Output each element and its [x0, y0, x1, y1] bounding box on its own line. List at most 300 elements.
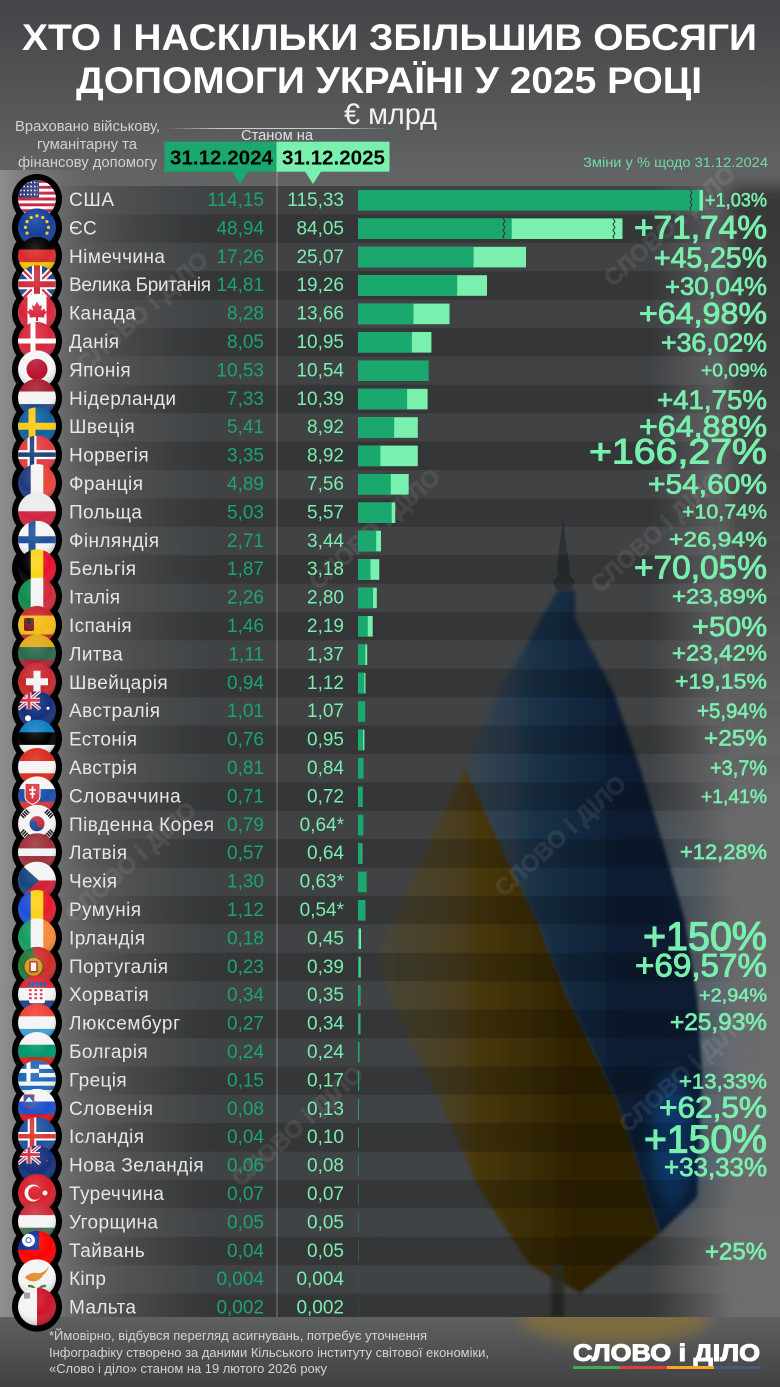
value 2024: 0,76 [227, 730, 264, 751]
row: Словенія [18, 1089, 767, 1127]
percent change: +26,94% [669, 529, 767, 552]
value 2024: 1,01 [227, 701, 264, 722]
percent change: +3,7% [710, 757, 767, 780]
percent change: +25,93% [670, 1009, 767, 1036]
flag: Мальта [18, 1288, 56, 1326]
percent change: +25% [704, 726, 767, 751]
percent change: +69,57% [635, 947, 767, 983]
country name: Канада [69, 304, 136, 325]
flag: Туреччина [18, 1174, 56, 1212]
value 2024: 0,15 [227, 1070, 264, 1091]
bar [358, 502, 395, 523]
country name: Литва [69, 644, 123, 665]
percent change: +150% [643, 915, 767, 959]
flag: Польща [18, 494, 56, 526]
row: Люксембург [18, 1004, 767, 1042]
bar with axis break [358, 190, 703, 211]
bar [358, 1070, 359, 1091]
bar [358, 474, 409, 495]
value 2024: 0,24 [227, 1042, 264, 1063]
row: Хорватія [18, 975, 767, 1014]
value 2024: 8,28 [227, 304, 264, 325]
row: Кіпр [18, 1259, 358, 1297]
percent change: +25% [705, 1238, 767, 1265]
footer notes: *Ймовірно, відбувся перегляд асигнувань, потребує уточнення [49, 1328, 427, 1343]
value 2024: 0,94 [227, 673, 264, 694]
row: Південна Корея [18, 805, 363, 843]
value 2025: 1,07 [307, 701, 344, 722]
value 2024: 10,53 [216, 360, 264, 381]
flag: Чехія [18, 862, 56, 900]
bar [358, 446, 418, 466]
value 2024: 0,34 [227, 985, 264, 1006]
row: Румунія [18, 890, 366, 928]
value 2024: 1,46 [227, 616, 264, 637]
flag: Південна Корея [18, 805, 56, 843]
value 2024: 1,30 [227, 872, 264, 893]
row: Ісландія [18, 1117, 767, 1162]
bar [358, 872, 367, 892]
note: change column: Зміни у % щодо 31.12.2024 [583, 154, 768, 170]
country name: Фінляндія [69, 531, 159, 552]
date header [164, 127, 390, 184]
row: Швейцарія [18, 663, 766, 696]
row: Австралія [18, 691, 766, 724]
bar [358, 616, 373, 637]
percent change: +23,89% [672, 585, 767, 608]
country name: Італія [69, 588, 120, 609]
bar [357, 1156, 360, 1176]
bar [358, 247, 526, 267]
value 2025: 1,12 [307, 673, 344, 694]
value 2024: 0,81 [227, 758, 264, 779]
percent change: +1,03% [705, 190, 767, 212]
value 2025: 0,72 [307, 786, 344, 807]
percent change: +19,15% [675, 670, 767, 693]
value 2025: 3,44 [307, 531, 344, 552]
country name: Румунія [69, 900, 141, 921]
row: Канада [18, 294, 767, 332]
flag: Швеція [18, 407, 56, 440]
percent change: +33,33% [664, 1152, 767, 1182]
value 2024: 0,04 [227, 1241, 264, 1262]
watermarks: СЛОВО і ДІЛО [490, 771, 632, 902]
watermarks: СЛОВО і ДІЛО [304, 464, 446, 595]
value 2024: 7,33 [227, 389, 264, 410]
row: Нідерланди [18, 379, 766, 413]
row stripes [60, 214, 740, 1317]
country name: Швейцарія [69, 673, 168, 694]
country name: Мальта [69, 1298, 136, 1319]
country name: Латвія [69, 843, 127, 864]
row: Японія [18, 350, 767, 384]
watermarks: СЛОВО і ДІЛО [72, 247, 214, 378]
chart: aid by country [18, 180, 767, 1326]
footer band [0, 1317, 780, 1387]
flag: Португалія [18, 947, 56, 985]
row: Туреччина [18, 1174, 359, 1212]
watermarks: СЛОВО і ДІЛО [60, 797, 202, 928]
value 2024: 2,71 [227, 531, 264, 552]
country name: Данія [69, 332, 119, 353]
row: Фінляндія [18, 520, 766, 554]
row: Польща [18, 494, 767, 526]
watermarks: СЛОВО і ДІЛО [586, 467, 728, 598]
percent change: +12,28% [680, 841, 767, 864]
value 2025: 2,19 [307, 616, 344, 637]
row: Швеція [18, 407, 766, 440]
country name: Кіпр [69, 1269, 106, 1290]
percent change: +54,60% [648, 468, 767, 500]
value 2025: 0,54* [300, 900, 345, 921]
percent change: +64,88% [639, 411, 767, 444]
percent change: +70,05% [634, 550, 767, 586]
row: Мальта [18, 1288, 358, 1326]
percent change: +71,74% [634, 209, 767, 245]
country name: Польща [69, 502, 142, 523]
country name: Нова Зеландія [69, 1156, 204, 1177]
country name: Хорватія [69, 985, 149, 1006]
bar [358, 559, 379, 580]
bar [358, 957, 361, 977]
value 2024: 14,81 [216, 275, 264, 296]
country name: Ісландія [69, 1127, 144, 1148]
country name: Туреччина [69, 1184, 164, 1205]
note: aid types: фінансову допомогу [18, 154, 157, 171]
title: ХТО І НАСКІЛЬКИ ЗБІЛЬШИВ ОБСЯГИ [22, 16, 757, 58]
flag: Словаччина [18, 776, 56, 815]
bar [358, 843, 362, 864]
bar [358, 417, 418, 438]
value 2024: 1,87 [227, 559, 264, 580]
value 2025: 1,37 [307, 644, 344, 665]
flag: Іспанія [18, 606, 56, 640]
flag: Японія [18, 350, 56, 384]
value 2025: 84,05 [296, 218, 344, 239]
percent change: +0,09% [701, 360, 767, 381]
value 2024: 1,11 [228, 644, 264, 665]
flag rings [12, 174, 62, 1334]
country name: Ірландія [69, 928, 145, 949]
row: Нова Зеландія [18, 1146, 767, 1184]
country name: Японія [69, 360, 131, 381]
value 2025: 0,05 [307, 1212, 344, 1233]
watermarks: СЛОВО і ДІЛО [614, 1007, 756, 1138]
flag: Румунія [18, 890, 56, 928]
percent change: +23,42% [672, 641, 767, 666]
value 2024: 0,04 [227, 1127, 264, 1148]
value 2024: 0,71 [227, 786, 264, 807]
watermarks: СЛОВО і ДІЛО [599, 161, 741, 292]
value 2024: 1,12 [227, 900, 264, 921]
value 2025: 0,13 [307, 1099, 344, 1120]
value 2024: 48,94 [216, 218, 264, 239]
value 2024: 3,35 [227, 446, 264, 467]
bar [358, 332, 431, 353]
country name: Словаччина [69, 786, 181, 807]
value 2024: 0,23 [227, 957, 264, 978]
flag: Ірландія [18, 918, 56, 956]
flag: Нова Зеландія [18, 1146, 56, 1184]
country name: Франція [69, 474, 143, 495]
flag: Італія [18, 578, 56, 611]
country name: Південна Корея [69, 815, 214, 836]
value 2025: 0,24 [307, 1042, 344, 1063]
flag: Бельгія [18, 549, 56, 582]
value 2024: 5,03 [227, 502, 264, 523]
country name: Тайвань [69, 1241, 145, 1262]
country name: США [69, 190, 114, 211]
percent change: +150% [644, 1119, 767, 1162]
row: Греція [18, 1060, 767, 1098]
row: Бельгія [18, 549, 767, 587]
bar [358, 1099, 359, 1119]
value 2024: 2,26 [227, 588, 264, 609]
row: Словаччина [18, 776, 767, 815]
bar [358, 531, 381, 551]
background photo: Ukrainian flag [377, 519, 725, 1318]
row: Литва [18, 634, 766, 668]
row: Ірландія [18, 915, 767, 959]
value 2025: 0,34 [307, 1014, 344, 1035]
bar [358, 673, 366, 693]
note: aid types: Враховано військову, [15, 118, 160, 135]
percent change: +36,02% [661, 330, 767, 358]
country name: Португалія [69, 957, 168, 978]
value 2025: 115,33 [287, 190, 344, 211]
percent change: +166,27% [589, 432, 767, 471]
value 2025: 0,84 [307, 758, 344, 779]
flag: США [18, 180, 56, 214]
value 2025: 0,45 [307, 928, 344, 949]
country name: Нідерланди [69, 389, 176, 410]
value 2024: 0,004 [216, 1269, 264, 1290]
row: Естонія [18, 720, 767, 758]
row: Норвегія [18, 436, 766, 469]
value 2025: 0,08 [307, 1156, 344, 1177]
value 2025: 0,002 [296, 1298, 344, 1319]
value 2025: 8,92 [307, 417, 344, 438]
bar [357, 1184, 360, 1205]
bar [358, 758, 364, 779]
row: Тайвань [18, 1231, 767, 1269]
bar [358, 730, 364, 750]
country name: Австрія [69, 758, 137, 779]
country name: Швеція [69, 417, 135, 438]
value 2024: 0,05 [227, 1212, 264, 1233]
bar [357, 1269, 360, 1290]
bar [358, 588, 377, 608]
country name: Люксембург [69, 1014, 180, 1035]
country name: Велика Британія [69, 275, 211, 296]
percent change: +50% [692, 611, 767, 642]
value 2025: 7,56 [307, 474, 344, 495]
flag: Греція [18, 1060, 56, 1098]
row: США [18, 180, 767, 218]
bar [358, 360, 429, 381]
subtitle: unit: € млрд [344, 98, 437, 131]
bar [358, 928, 361, 949]
row: Данія [18, 322, 766, 356]
percent change: +10,74% [682, 501, 767, 523]
percent change: +30,04% [665, 274, 767, 301]
row: ЄС [18, 208, 767, 246]
value 2024: 4,89 [227, 474, 264, 495]
country name: Болгарія [69, 1042, 148, 1063]
country name: ЄС [69, 218, 97, 239]
date header: 31.12.2024 [170, 146, 274, 170]
value 2025: 0,63* [300, 872, 345, 893]
value 2024: 5,41 [227, 417, 264, 438]
flag: ЄС [18, 208, 56, 242]
row: Угорщина [18, 1202, 359, 1241]
bar [358, 304, 450, 324]
flag: Угорщина [18, 1202, 56, 1241]
bar [358, 786, 363, 807]
date header: 31.12.2025 [282, 146, 385, 170]
row: Франція [18, 464, 766, 498]
flag: Фінляндія [18, 520, 56, 554]
footer notes [49, 1328, 489, 1376]
percent change: +41,75% [657, 385, 767, 415]
country name: Бельгія [69, 559, 136, 580]
value 2025: 10,54 [296, 360, 344, 381]
country name: Греція [69, 1070, 127, 1091]
flag: Франція [18, 464, 56, 498]
bar [358, 1042, 360, 1063]
column divider [276, 171, 278, 1317]
bar [357, 1298, 360, 1318]
country name: Чехія [69, 872, 117, 893]
row: Італія [18, 578, 766, 611]
flag: Тайвань [18, 1231, 56, 1269]
watermarks [60, 161, 756, 1192]
flag: Ісландія [18, 1117, 56, 1155]
bar with axis breaks [358, 218, 622, 239]
bar [358, 644, 367, 665]
flag: Канада [18, 294, 56, 327]
value 2024: 0,57 [227, 843, 264, 864]
value 2025: 0,17 [307, 1070, 344, 1091]
percent change: +1,41% [701, 786, 767, 808]
value 2025: 0,95 [307, 730, 344, 751]
row: Іспанія [18, 606, 766, 640]
country name: Словенія [69, 1099, 153, 1120]
bar [358, 1014, 360, 1034]
value 2025: 19,26 [296, 275, 344, 296]
row: Австрія [18, 748, 767, 786]
value 2024: 0,18 [227, 928, 264, 949]
value 2025: 0,004 [296, 1269, 344, 1290]
row: Чехія [18, 862, 367, 900]
value 2024: 0,27 [227, 1014, 264, 1035]
value 2024: 17,26 [216, 247, 264, 268]
value 2025: 3,18 [307, 559, 344, 580]
value 2025: 25,07 [296, 247, 344, 268]
country name: Угорщина [69, 1212, 158, 1233]
percent change: +64,98% [639, 297, 767, 330]
flag: Австралія [18, 691, 56, 724]
value 2024: 8,05 [227, 332, 264, 353]
bar [357, 1212, 360, 1233]
value 2025: 0,05 [307, 1241, 344, 1262]
bar [357, 1241, 360, 1261]
row: Болгарія [18, 1032, 360, 1070]
value 2025: 10,95 [296, 332, 344, 353]
value 2025: 0,07 [307, 1184, 344, 1205]
value 2025: 0,64 [307, 843, 344, 864]
bar [357, 1127, 360, 1148]
value 2024: 0,06 [227, 1156, 264, 1177]
bar [358, 900, 366, 921]
percent change: +2,94% [699, 984, 767, 1005]
country name: Норвегія [69, 446, 149, 467]
title: ДОПОМОГИ УКРАЇНІ У 2025 РОЦІ [76, 59, 702, 101]
note: aid types: гуманітарну та [37, 136, 138, 153]
value 2024: 0,08 [227, 1099, 264, 1120]
footer notes: Інфографіку створено за даними Кільського інституту світової економіки, [49, 1345, 489, 1360]
value 2025: 0,10 [307, 1127, 344, 1148]
date header: Станом на [241, 127, 314, 144]
flag: Болгарія [18, 1032, 56, 1070]
country name: Іспанія [69, 616, 132, 637]
value 2025: 2,80 [307, 588, 344, 609]
value 2025: 8,92 [307, 446, 344, 467]
value 2024: 0,002 [216, 1298, 264, 1319]
row: Велика Британія [18, 265, 766, 299]
value 2025: 5,57 [307, 502, 344, 523]
flag: Литва [18, 634, 56, 668]
percent change: +45,25% [654, 242, 767, 274]
watermarks: СЛОВО і ДІЛО [227, 1061, 369, 1192]
flag: Хорватія [18, 975, 56, 1014]
flag: Австрія [18, 748, 56, 786]
value 2024: 0,07 [227, 1184, 264, 1205]
value 2024: 0,79 [227, 815, 264, 836]
flag: Латвія [18, 833, 56, 871]
value 2025: 13,66 [296, 304, 344, 325]
bar [358, 389, 428, 409]
value 2025: 0,35 [307, 985, 344, 1006]
row: Португалія [18, 947, 767, 985]
note: aid types [15, 118, 160, 171]
footer notes: «Слово і діло» станом на 19 лютого 2026 року [49, 1361, 327, 1376]
bar [358, 275, 487, 296]
flag: Люксембург [18, 1004, 56, 1042]
row: Німеччина [18, 237, 767, 275]
flag: Словенія [18, 1089, 56, 1127]
flag: Швейцарія [18, 663, 56, 696]
flag: Німеччина [18, 236, 56, 270]
country name: Німеччина [69, 247, 165, 268]
percent change: +62,5% [659, 1091, 767, 1124]
flag: Естонія [18, 720, 56, 758]
percent change: +13,33% [679, 1069, 767, 1093]
title [22, 16, 757, 101]
percent change: +5,94% [697, 700, 767, 723]
bar [358, 701, 365, 722]
bar [358, 815, 363, 835]
country name: Австралія [69, 701, 160, 722]
bar [358, 985, 360, 1006]
row: Латвія [18, 833, 767, 871]
value 2025: 0,64* [300, 815, 345, 836]
flag: Данія [18, 322, 56, 356]
logo: Слово і Діло: СЛОВО і ДІЛО [573, 1340, 760, 1367]
value 2024: 114,15 [207, 190, 264, 211]
flag: Норвегія [18, 436, 56, 469]
flag: Велика Британія [18, 265, 56, 298]
